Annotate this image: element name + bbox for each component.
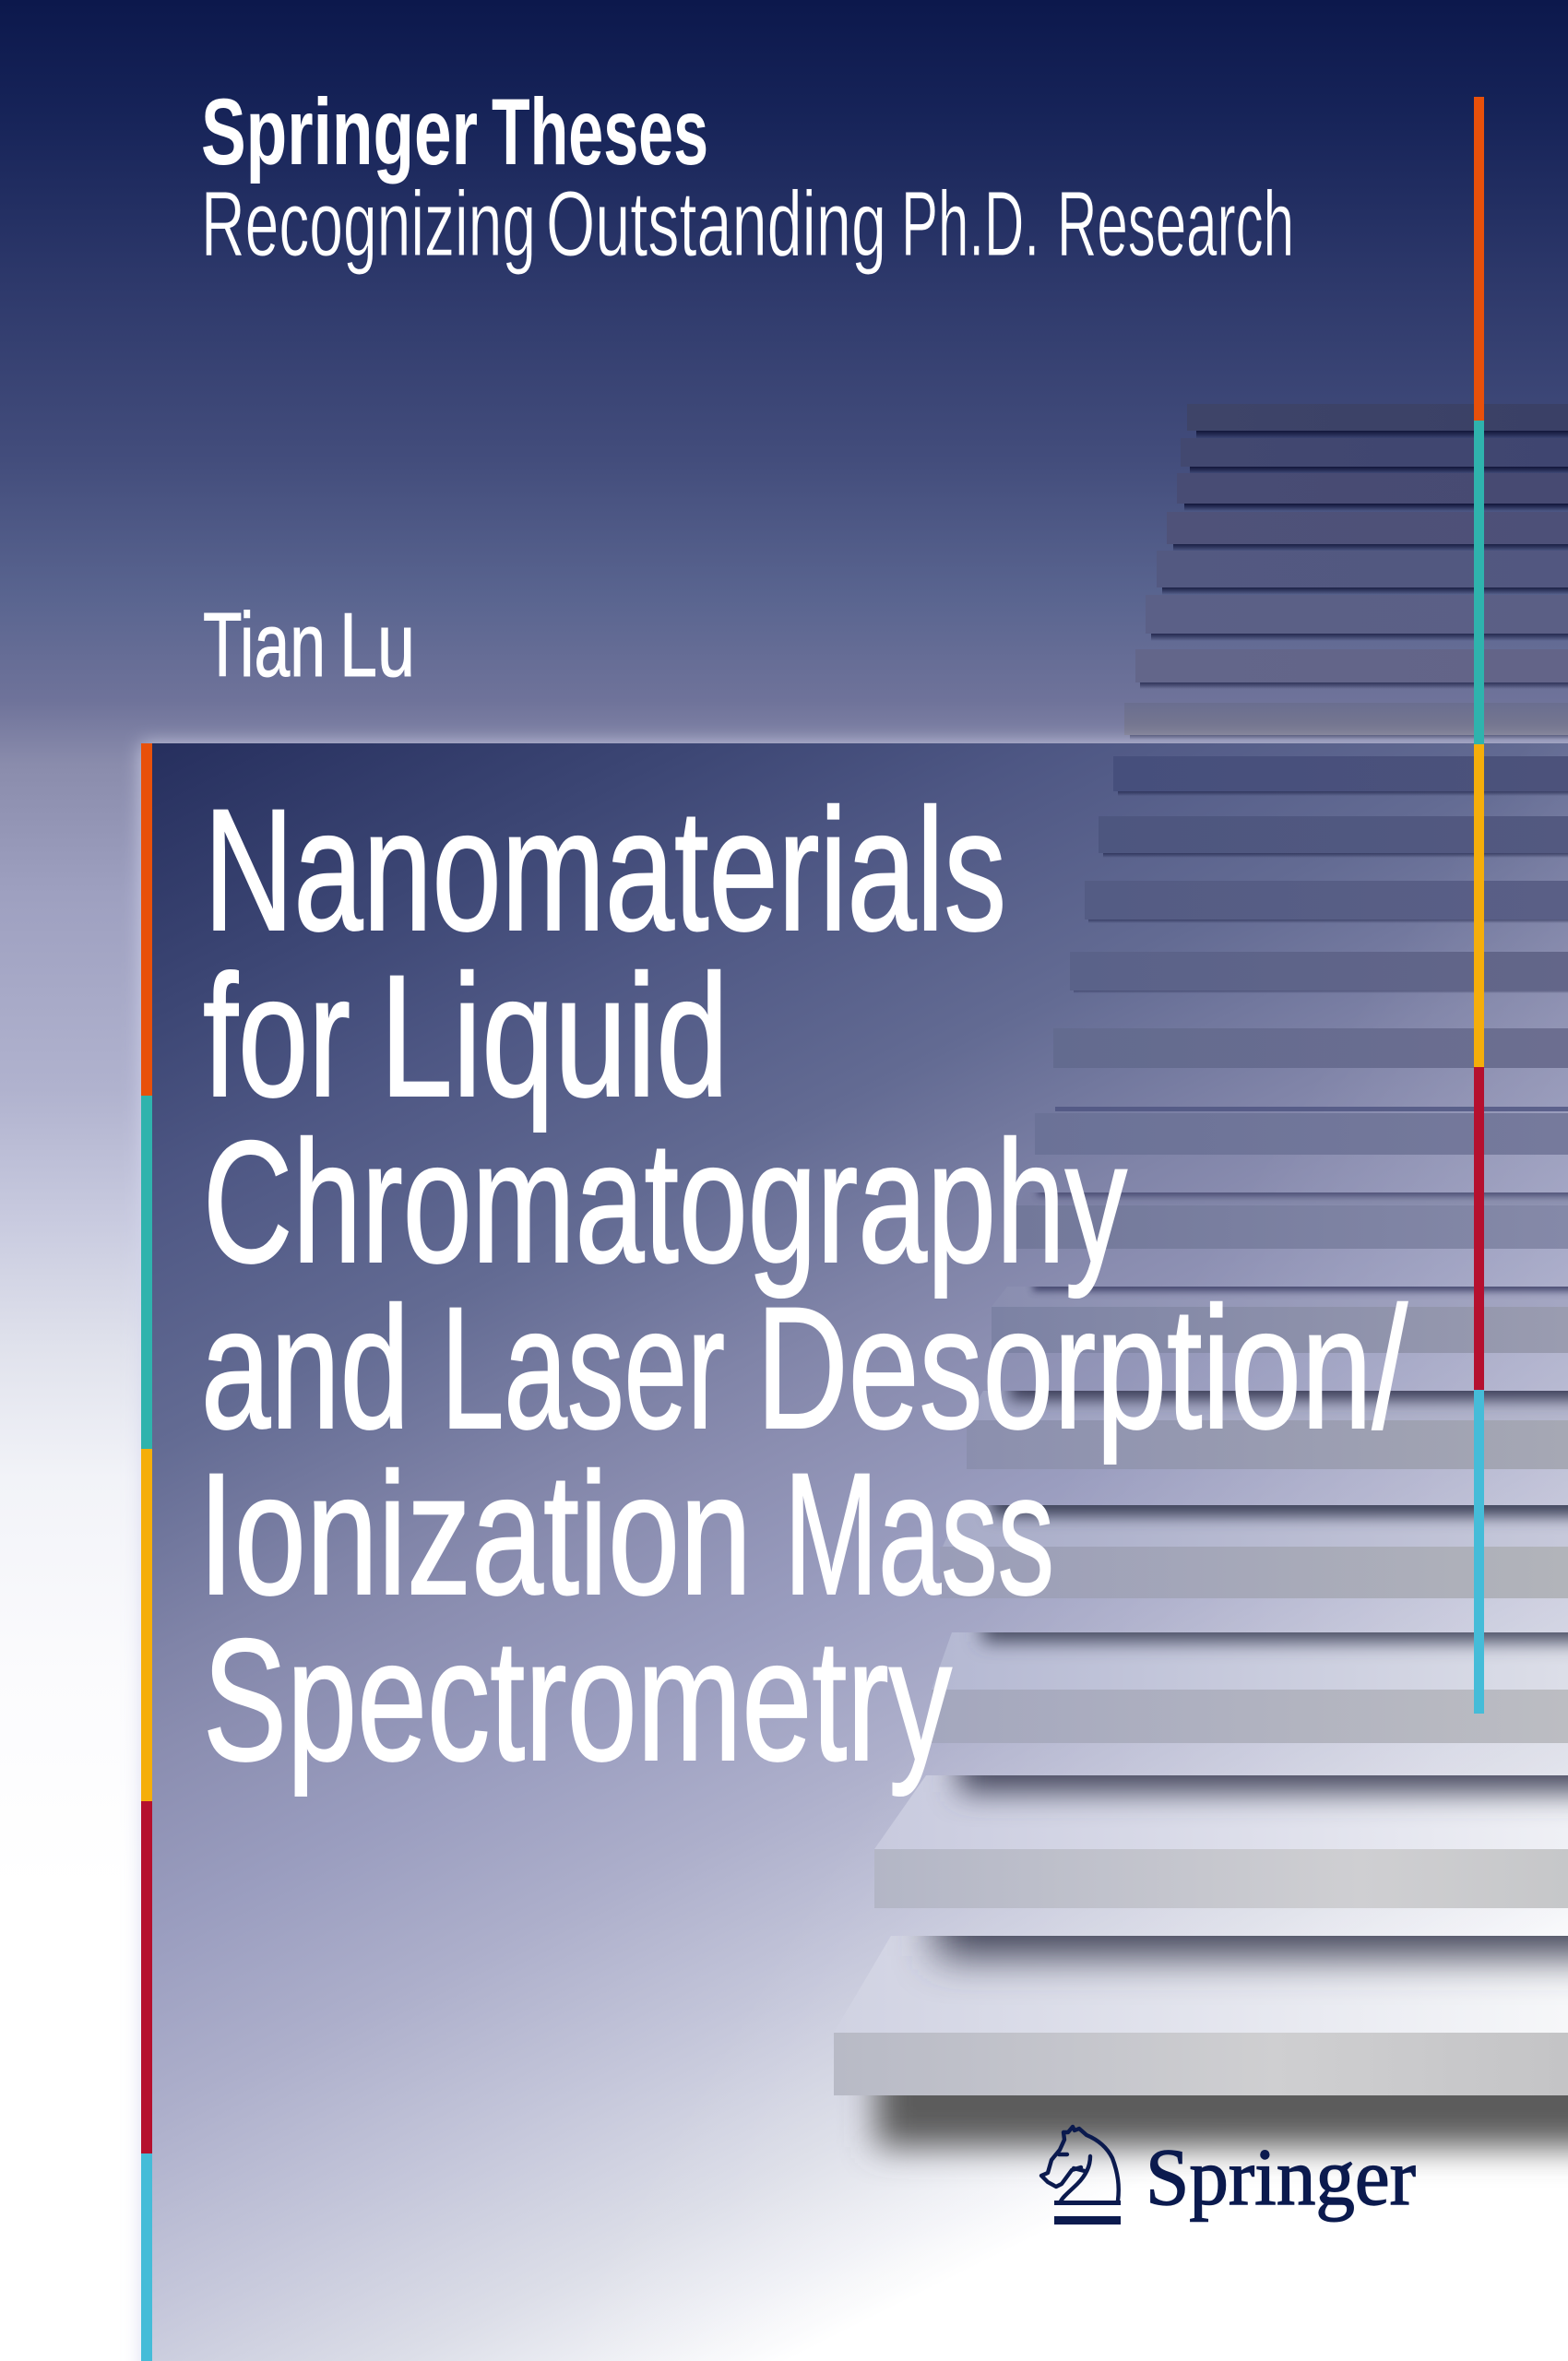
step 8 — [1035, 1107, 1568, 1155]
book title — [198, 773, 1408, 1797]
glow around the title panel — [141, 743, 1568, 2361]
upper staircase above the title panel — [1124, 404, 1568, 740]
wordmark: Springer — [1146, 2133, 1416, 2223]
book title: Liquid — [380, 939, 729, 1133]
series subtitle: Outstanding — [546, 172, 886, 276]
book title: Mass — [784, 1437, 1054, 1631]
step 2 — [874, 1775, 1568, 1908]
step 1 (bottom step) — [834, 1936, 1568, 2095]
book title: Chromatography — [203, 1105, 1127, 1299]
left colour bar — [141, 743, 152, 2361]
series subtitle: Recognizing — [201, 172, 536, 276]
book title: and — [201, 1271, 410, 1465]
book title: for — [203, 939, 350, 1133]
book title: Laser — [441, 1271, 725, 1465]
author: Lu — [339, 594, 415, 695]
publisher logo — [1041, 2127, 1416, 2225]
series subtitle: Research — [1057, 172, 1294, 276]
series title: Theses — [492, 79, 708, 184]
series subtitle: Ph.D. — [901, 172, 1039, 276]
lower staircase inside the title panel — [834, 756, 1568, 2147]
step 6 — [992, 1287, 1568, 1353]
step 3 — [932, 1632, 1568, 1743]
series title: Springer — [201, 79, 478, 184]
author: Tian — [203, 594, 326, 695]
icon: knight head — [1041, 2127, 1119, 2201]
drop shadow beneath the bottom step — [876, 2047, 1568, 2147]
step 7 — [1016, 1192, 1568, 1249]
book title: Spectrometry — [203, 1603, 952, 1797]
icon: logo base lines — [1054, 2201, 1121, 2205]
series subtitle — [201, 172, 1294, 276]
title panel — [141, 743, 1568, 2361]
step 4 — [940, 1505, 1568, 1598]
upper-panel steps — [1053, 756, 1568, 1068]
right colour bar — [1474, 97, 1484, 1714]
book title: Nanomaterials — [204, 773, 1006, 967]
book title: Ionization — [198, 1437, 752, 1631]
step 5 — [967, 1391, 1568, 1469]
